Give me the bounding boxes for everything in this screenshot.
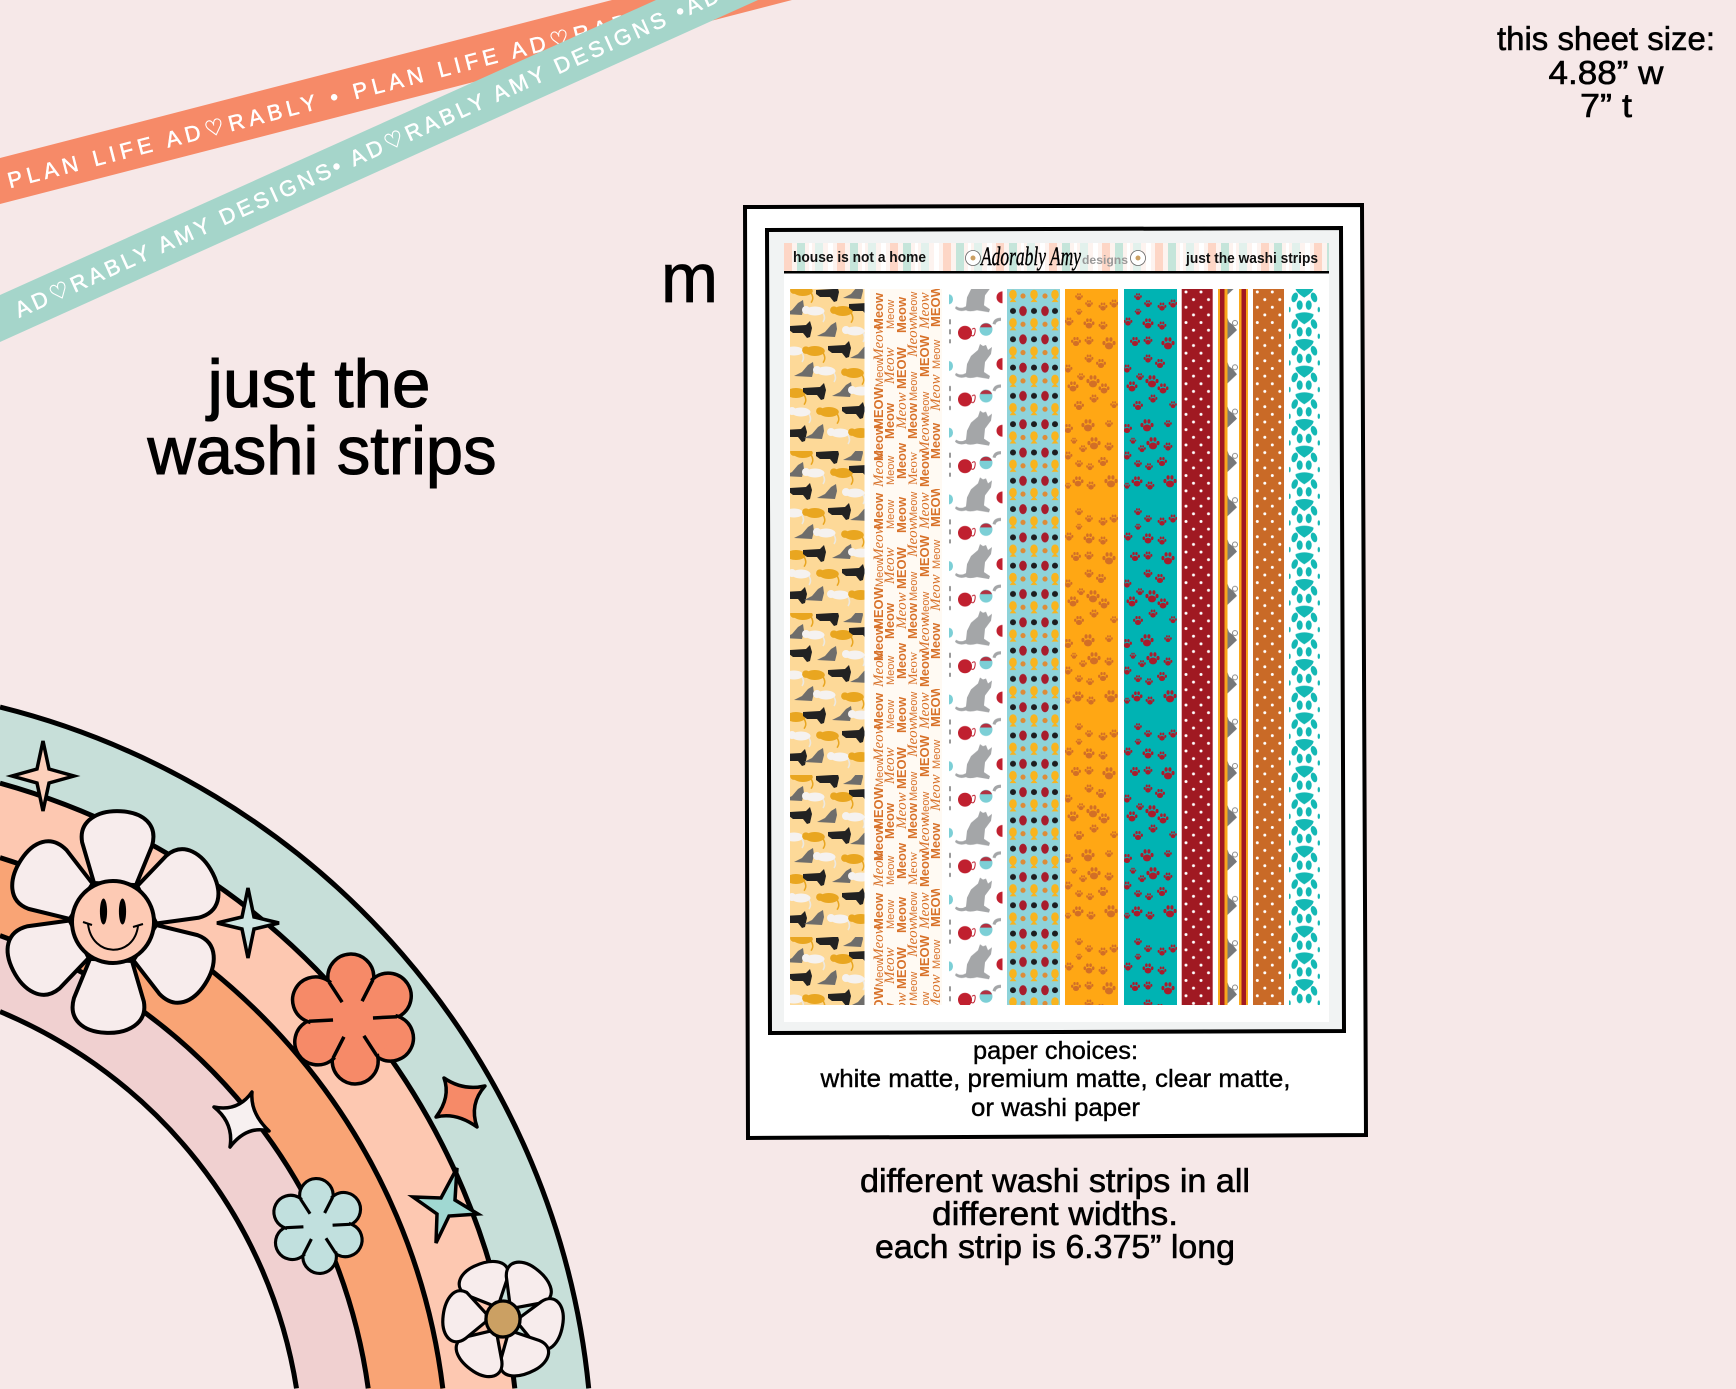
icon: mint flower [268, 1178, 368, 1274]
text: paper choices: paper choices: [973, 1037, 1138, 1065]
sheet header band: designs [1082, 253, 1128, 267]
strip 9: dots on burnt orange [1253, 289, 1284, 1005]
strip 5: paws on orange [1065, 289, 1118, 1005]
strip 4: fish and mice on aqua [1007, 289, 1060, 1005]
rainbow [0, 707, 589, 1389]
text: strip description: different washi strips in all [860, 1162, 1250, 1199]
strip 1: cats on yellow [790, 289, 864, 1005]
sheet size note [1497, 20, 1715, 124]
sheet size note: 7” t [1580, 87, 1632, 124]
icon: white daisy [441, 1254, 566, 1384]
strip 10: teal paws on white [1289, 289, 1320, 1005]
sheet header band [784, 242, 1329, 274]
sheet size note: 4.88” w [1548, 54, 1664, 91]
text: strip description: each strip is 6.375” long [875, 1228, 1235, 1265]
icon: peach sparkle star [12, 741, 74, 811]
sheet size note: this sheet size: [1497, 20, 1715, 57]
icon: coral rounded star [436, 1078, 485, 1127]
text: paper choices: or washi paper [971, 1094, 1140, 1122]
title [147, 346, 496, 489]
icon: mint sparkle star [217, 888, 279, 958]
icon: smiley flower [0, 809, 228, 1035]
panel: sticker sheet outer frame [745, 205, 1366, 1138]
text: paper choices: white matte, premium matte, clear matte, [819, 1065, 1290, 1093]
text: strip description: different widths. [932, 1195, 1178, 1232]
panel: inner sheet frame [767, 228, 1344, 1033]
title: just the [205, 346, 430, 422]
panel: white sheet area [784, 243, 1329, 1022]
sheet header band: house is not a home [793, 250, 926, 266]
text: paper choices [819, 1037, 1290, 1122]
strip 8: stripes with cats [1217, 289, 1248, 1005]
text: strip description [860, 1162, 1250, 1265]
strip 6: red paws on teal [1124, 289, 1177, 1005]
strip 2: meow lettering [870, 289, 942, 1005]
size letter m: m [661, 239, 718, 317]
icon: coral flower [285, 953, 421, 1085]
ribbon: orange Plan Life Adorably: PLAN LIFE AD♡RABLY • PLAN LIFE AD♡RABLY [5, 1, 664, 193]
icon: teal star [413, 1168, 478, 1243]
strip 7: dots on red [1182, 289, 1213, 1005]
icon: white rounded star [214, 1092, 269, 1147]
title: washi strips [147, 413, 496, 489]
sheet header band: just the washi strips [1185, 251, 1318, 267]
sheet header band: Adorably Amy [980, 242, 1081, 271]
strip 3: grey cat and yarn [949, 289, 1002, 1005]
